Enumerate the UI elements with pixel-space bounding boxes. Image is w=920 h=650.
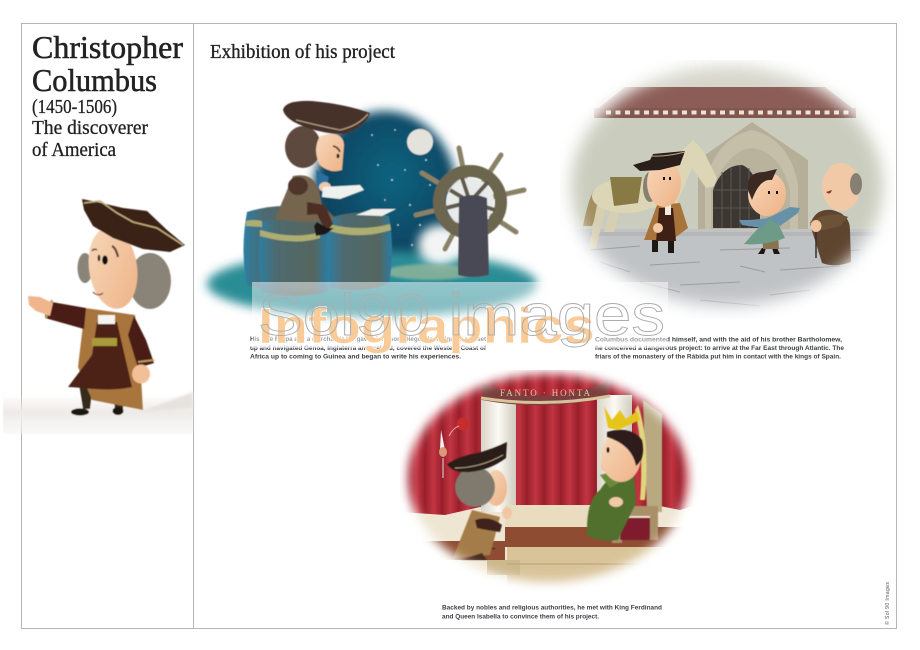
caption: project: friars of the monastery of the Rábida put him in contact with the kings of Spain. (595, 354, 841, 360)
section heading: Exhibition of his project (210, 42, 396, 63)
night sky (313, 111, 457, 275)
caption: project: Columbus documented himself, and with the aid of his brother Bartholomew, (595, 336, 842, 344)
floor shadow (3, 395, 193, 434)
title block (32, 29, 183, 161)
title: name: Christopher (32, 29, 183, 65)
ship wheel (416, 148, 524, 249)
illustration: Columbus on barrels at night (207, 101, 537, 317)
subtitle: The discoverer (32, 117, 148, 139)
moon (407, 129, 433, 155)
paper on barrel (356, 209, 396, 216)
horse (583, 140, 717, 248)
legs and shoes (71, 383, 124, 416)
watermark: Sol 90 images: Sol90 images (258, 283, 665, 348)
watermark: Infographics: Infographics (258, 298, 595, 354)
hair (78, 253, 171, 309)
credit: © Sol 90 Images (884, 582, 891, 625)
wall (562, 87, 892, 229)
roof tiles (594, 108, 856, 118)
banner: FANTO · HONTA (500, 388, 590, 398)
banner (481, 380, 610, 405)
face (84, 224, 142, 312)
illustration: Columbus, brother and friar at the monastery (560, 60, 895, 319)
friar (810, 163, 862, 265)
roof (645, 68, 809, 87)
subtitle (32, 117, 148, 161)
young brother (739, 169, 800, 254)
wall base (505, 505, 593, 527)
right arm (128, 316, 154, 384)
title: name (32, 29, 183, 98)
caption: project: he conceived a dangerous project: to arrive at the Far East through Atlantic. The (595, 345, 844, 352)
left pillar (481, 400, 516, 512)
throne (612, 400, 662, 543)
shirt and belt (92, 315, 117, 346)
title: name: Columbus (32, 62, 157, 98)
juggled knife, hand and apple (439, 418, 470, 478)
dates: (1450-1506) (32, 96, 117, 118)
pointing arm (28, 296, 86, 329)
steps (507, 547, 660, 587)
caption: voyages: His wife Felipa and a merchant's life gave him a son, Diego. He navigated and set (250, 336, 487, 343)
caption: meeting: Backed by nobles and religious authorities, he met with King Ferdinand (442, 604, 662, 612)
caption: meeting (442, 604, 662, 620)
kneeling Columbus (447, 442, 512, 560)
right pillar (597, 395, 632, 495)
doorway (713, 165, 760, 228)
Columbus (633, 151, 688, 253)
seated figure (275, 101, 370, 236)
illustration: Columbus pointing (3, 199, 193, 434)
watermark band (252, 282, 668, 348)
stars (371, 129, 441, 246)
watermark (252, 282, 668, 354)
illustration: audience with Queen Isabella (400, 370, 696, 588)
carpet (420, 527, 700, 560)
barrels (244, 206, 392, 296)
water (207, 251, 537, 317)
water glow (418, 225, 462, 265)
door grille (713, 165, 753, 228)
paving joints (590, 246, 860, 306)
red curtains (400, 370, 700, 515)
caption: voyages: Africa up to coming to Guinea and began to write his experiences. (250, 354, 461, 360)
caption: voyages (250, 336, 487, 360)
paving (576, 229, 878, 314)
caption: voyages: up and navigated Genoa, Inglaterra and Iceland, covered the Western Coast of (250, 345, 487, 352)
caption: meeting: and Queen Isabella to convince them of his project. (442, 614, 599, 620)
facial features (92, 246, 118, 295)
tricorn hat (82, 199, 185, 252)
floor shadow (590, 232, 880, 236)
stone arch (698, 122, 808, 230)
caption: project (595, 336, 844, 360)
queen (587, 406, 643, 540)
backdrop floor (412, 506, 686, 582)
wheel pedestal (458, 195, 489, 277)
subtitle: of America (32, 139, 116, 161)
coat (78, 308, 143, 410)
tunic (68, 322, 132, 389)
